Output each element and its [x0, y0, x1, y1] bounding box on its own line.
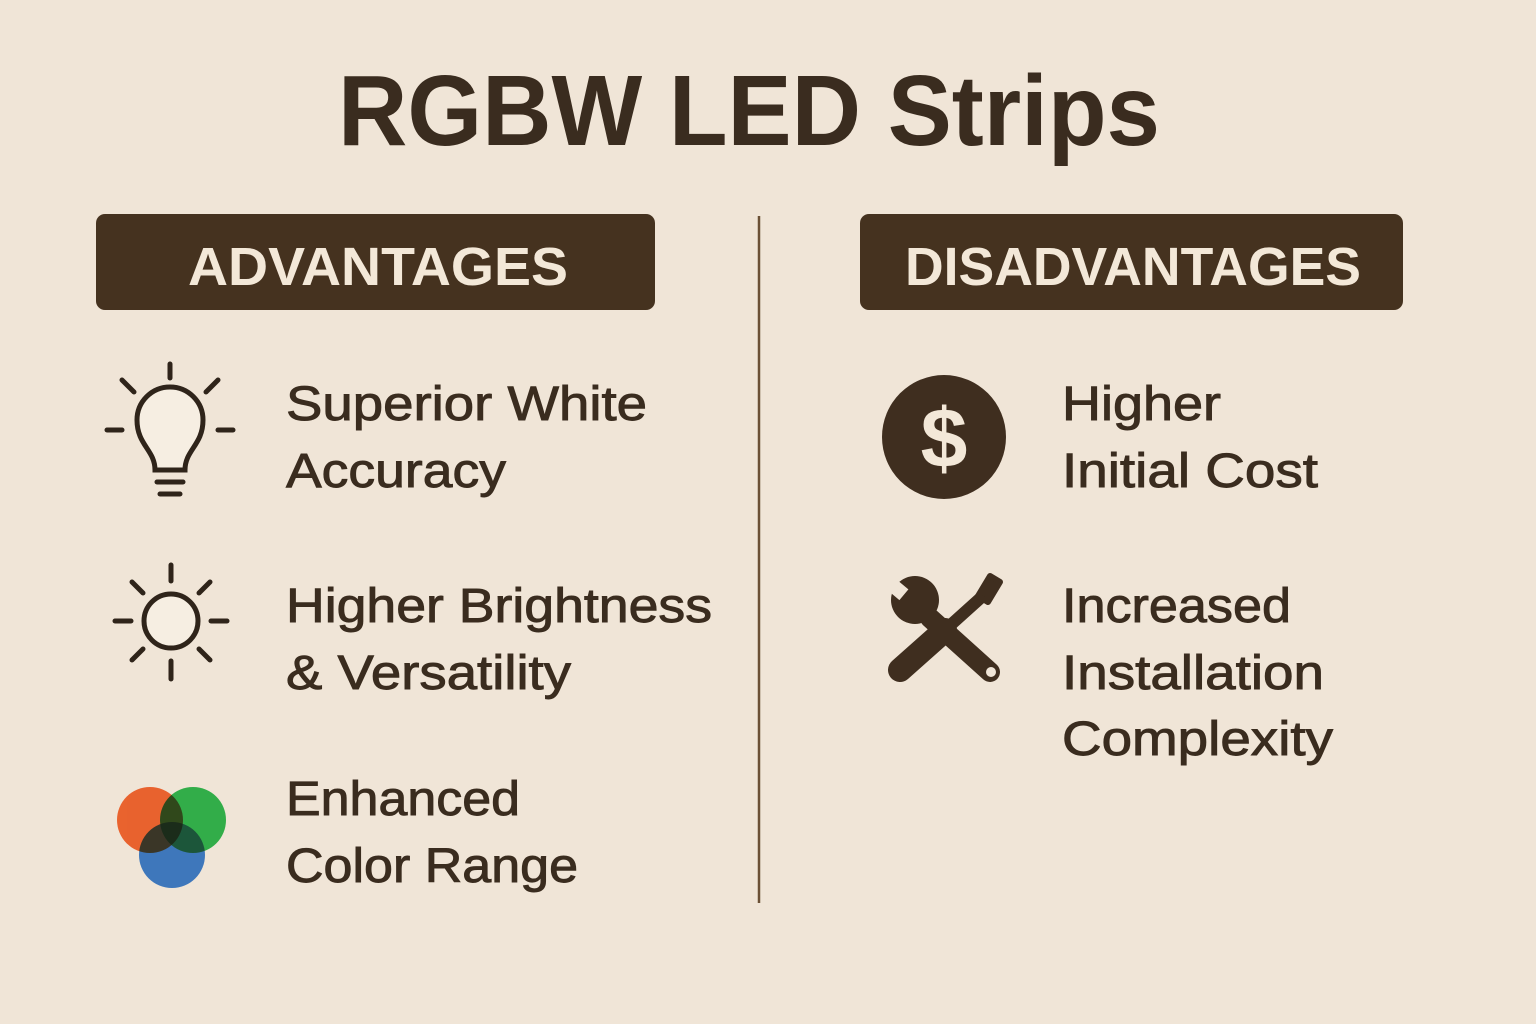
text: enhanced color range: Enhanced	[286, 773, 520, 826]
text: higher initial cost: Initial Cost	[1062, 445, 1318, 498]
text: increased installation complexity	[1062, 580, 1333, 766]
text: higher initial cost	[1062, 378, 1318, 498]
header: disadvantages: DISADVANTAGES	[905, 237, 1361, 297]
header: advantages: ADVANTAGES	[188, 237, 568, 297]
text: higher initial cost: Higher	[1062, 378, 1221, 431]
text: superior white accuracy	[286, 378, 647, 498]
text: increased installation complexity: Complexity	[1062, 713, 1333, 766]
icon: dollar	[882, 375, 1006, 499]
text: superior white accuracy: Superior White	[286, 378, 647, 431]
icon: light bulb	[107, 364, 233, 494]
text: higher brightness	[286, 580, 712, 700]
icon: color circles	[117, 787, 226, 888]
header: advantages	[96, 214, 655, 310]
text: enhanced color range: Color Range	[286, 840, 578, 893]
text: increased installation complexity: Increased	[1062, 580, 1291, 633]
text: enhanced color range	[286, 773, 578, 893]
text: higher brightness: Higher Brightness	[286, 580, 712, 633]
text: increased installation complexity: Installation	[1062, 647, 1324, 700]
icon: sun	[115, 565, 227, 679]
title: RGBW LED Strips	[338, 55, 1160, 167]
icon: tools	[886, 576, 1000, 677]
header: disadvantages	[860, 214, 1403, 310]
text: superior white accuracy: Accuracy	[286, 445, 506, 498]
icon: dollar: $	[921, 391, 967, 485]
text: higher brightness: & Versatility	[286, 647, 571, 700]
